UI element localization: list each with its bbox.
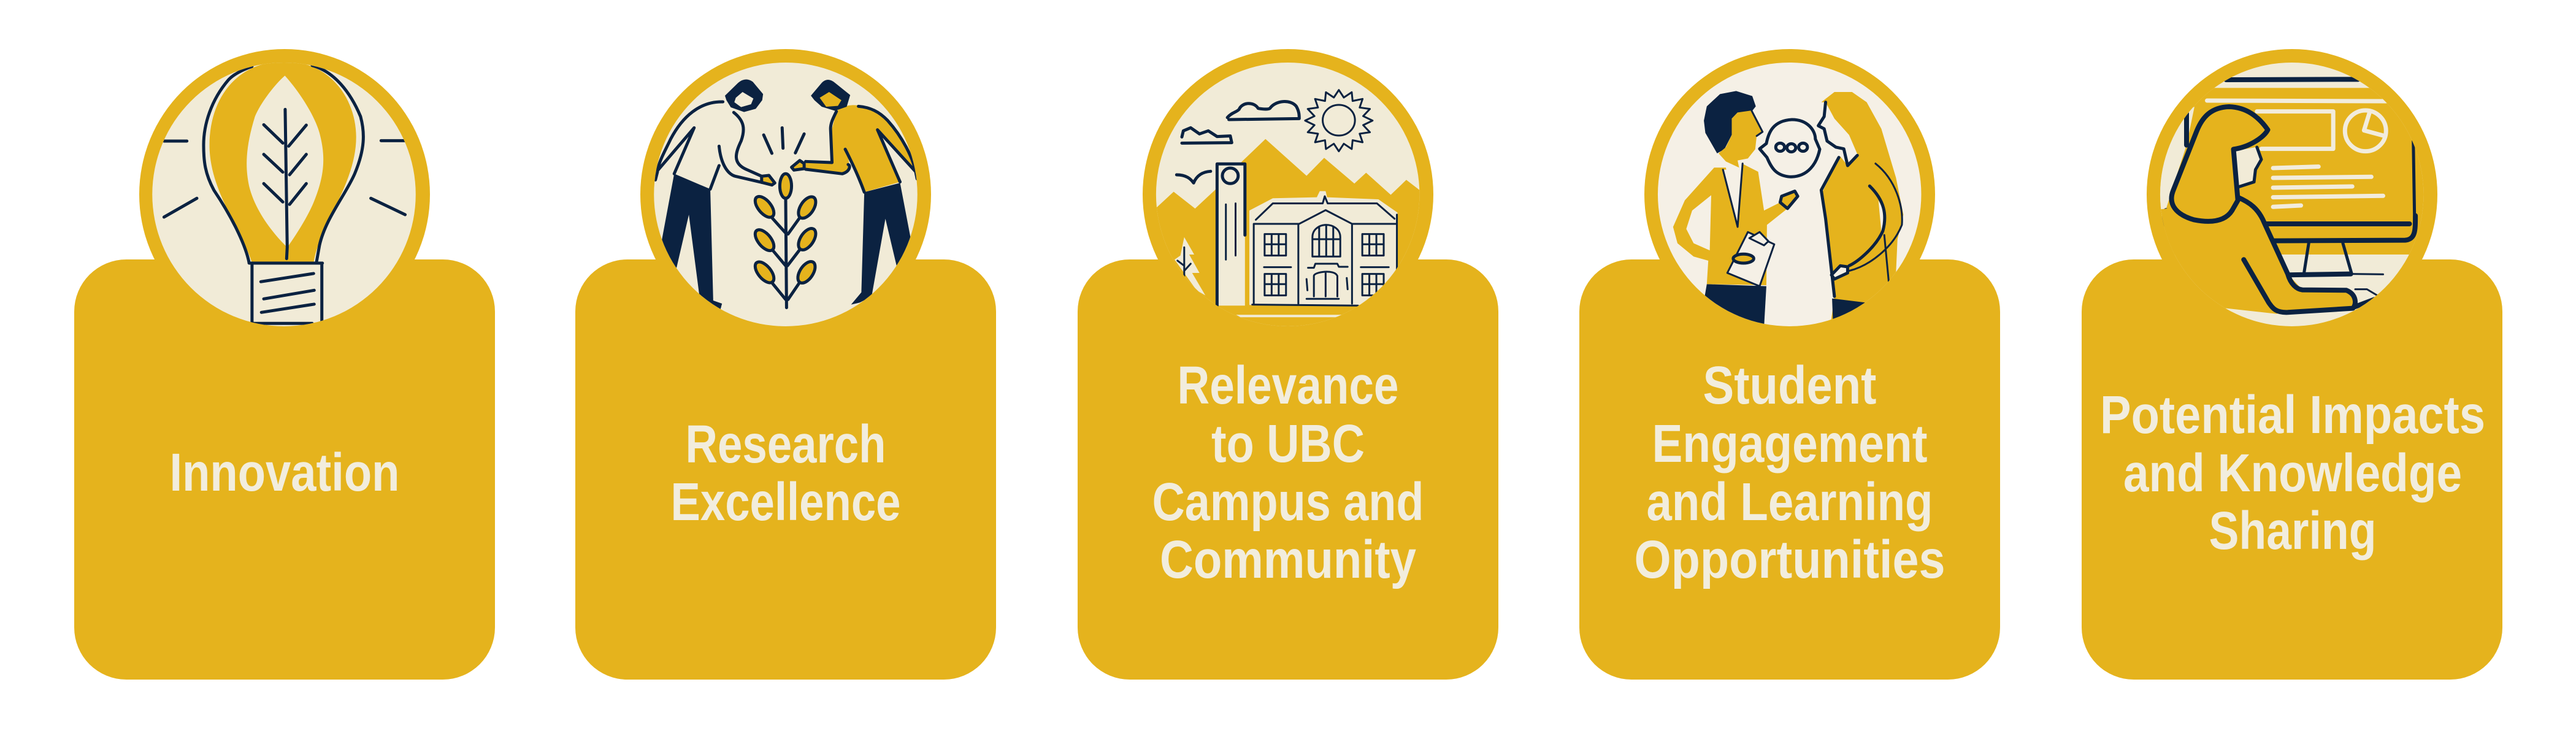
ring: potential — [2147, 49, 2437, 340]
label: innovation: Innovation — [169, 443, 400, 502]
icon: two people and a plant — [654, 63, 918, 326]
label: relevance — [1152, 356, 1424, 589]
label: relevance: to UBC — [1211, 414, 1365, 473]
card: innovation — [74, 259, 495, 680]
label: potential impacts — [2100, 385, 2485, 561]
icon: light bulb with leaf — [152, 61, 416, 326]
label: relevance: Relevance — [1178, 356, 1398, 415]
card: research — [575, 259, 996, 680]
label: student engagement: and Learning — [1646, 472, 1933, 532]
icon: two people talking — [1658, 63, 1928, 337]
label: potential impacts: Potential Impacts — [2100, 385, 2485, 445]
panel: innovation — [74, 49, 495, 680]
label: relevance: Community — [1160, 530, 1416, 589]
ring: research — [640, 49, 931, 340]
card: potential — [2082, 259, 2502, 680]
icon: campus building, mountains, sun — [1103, 63, 1455, 337]
card: relevance — [1078, 259, 1498, 680]
panel: research excellence — [575, 49, 996, 680]
label: relevance: Campus and — [1152, 472, 1424, 532]
label: research excellence: Excellence — [671, 472, 900, 532]
icon: person at a monitor — [2115, 63, 2467, 326]
label: potential impacts: and Knowledge — [2123, 443, 2462, 503]
ring: student — [1644, 49, 1935, 340]
panel: potential impacts — [2082, 49, 2502, 680]
label: student engagement — [1634, 356, 1945, 589]
ring: relevance — [1143, 49, 1433, 340]
panel: relevance to campus — [1078, 49, 1498, 680]
label: student engagement: Engagement — [1652, 414, 1927, 473]
label: student engagement: Student — [1703, 356, 1877, 415]
label: research excellence — [671, 415, 900, 532]
label: potential impacts: Sharing — [2209, 501, 2376, 561]
label: research excellence: Research — [686, 415, 886, 474]
label: student engagement: Opportunities — [1634, 530, 1945, 589]
ring: innovation — [139, 49, 430, 340]
card: student — [1579, 259, 2000, 680]
panel: student engagement — [1579, 49, 2000, 680]
